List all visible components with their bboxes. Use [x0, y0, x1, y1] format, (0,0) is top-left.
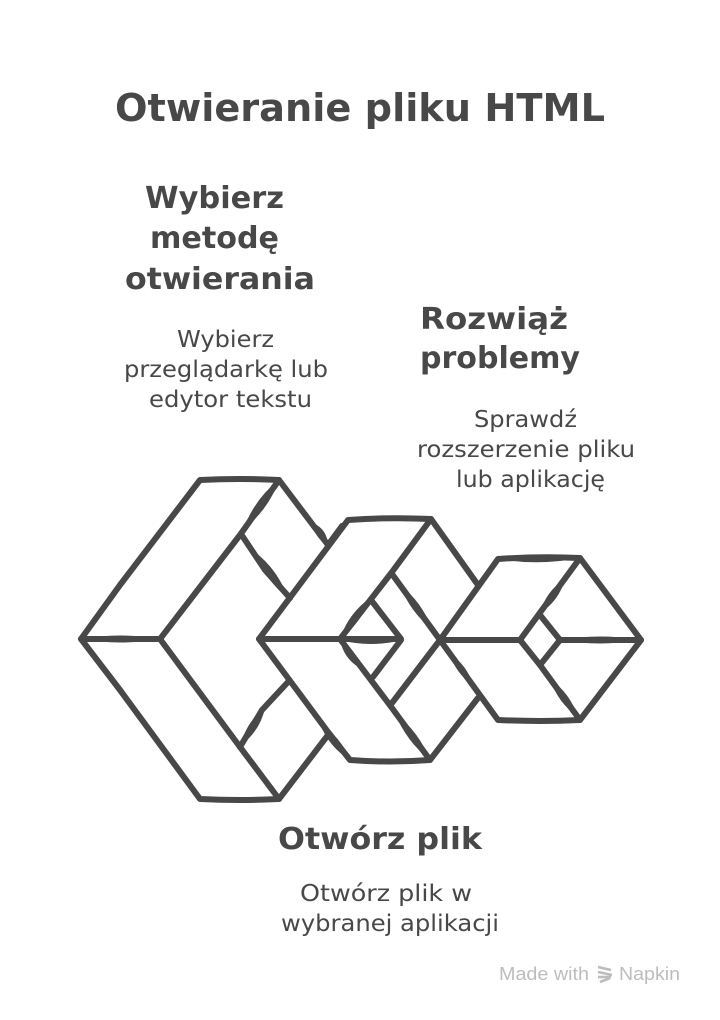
description: open file — [281, 881, 499, 937]
heading: choose method: metodę — [150, 221, 279, 256]
watermark: Made with Napkin: Napkin — [619, 964, 680, 984]
text block: choose method — [124, 181, 328, 413]
block: large left — [81, 479, 342, 800]
heading: troubleshoot: Rozwiąż — [420, 302, 568, 337]
heading: open file: Otwórz plik — [278, 822, 483, 857]
block: small right — [440, 555, 641, 721]
description: troubleshoot: Sprawdź — [474, 407, 577, 433]
watermark: Made with Napkin: Made with — [499, 964, 589, 984]
description: choose method: edytor tekstu — [149, 387, 312, 413]
description: choose method: przeglądarkę lub — [124, 357, 328, 383]
description: open file: Otwórz plik w — [300, 881, 472, 907]
heading: troubleshoot — [420, 302, 580, 376]
description: troubleshoot: rozszerzenie pliku — [417, 437, 635, 463]
text block: troubleshoot — [417, 302, 635, 493]
description: open file: wybranej aplikacji — [281, 911, 499, 937]
diagram: nested hexagonal blocks — [81, 479, 641, 800]
icon: napkin logo — [598, 967, 612, 982]
heading: troubleshoot: problemy — [420, 341, 580, 376]
description: troubleshoot — [417, 407, 635, 493]
heading: choose method — [125, 181, 315, 297]
heading: choose method: otwierania — [125, 262, 315, 297]
description: troubleshoot: lub aplikację — [456, 467, 605, 493]
watermark: Made with Napkin — [499, 964, 680, 984]
title: Otwieranie pliku HTML — [115, 86, 605, 130]
description: choose method: Wybierz — [177, 327, 274, 353]
text block: open file — [278, 822, 499, 937]
heading: choose method: Wybierz — [145, 181, 284, 216]
block: middle — [259, 518, 478, 762]
description: choose method — [124, 327, 328, 413]
